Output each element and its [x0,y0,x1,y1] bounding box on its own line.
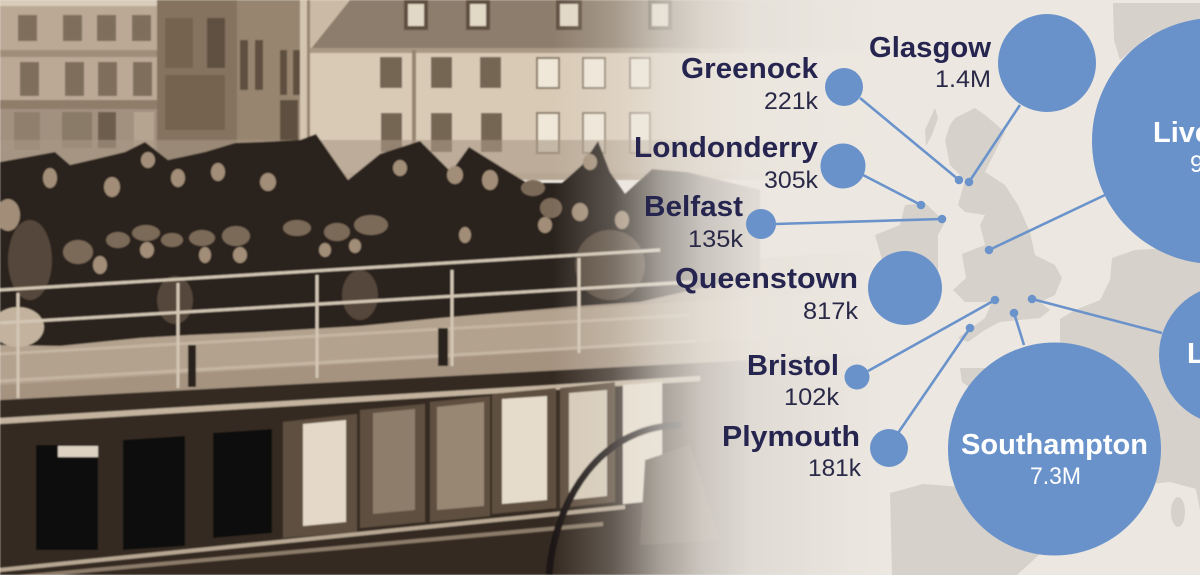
bubble: London [1159,285,1200,425]
paddle wheel arc and figure [549,425,720,575]
map of the British Isles and western Europe [875,3,1200,575]
bubble: Belfast: Belfast [644,191,743,223]
continental Europe [890,240,1200,575]
bubble: Queenstown: 817k [803,298,859,325]
bubble: Liverpool [1092,18,1200,264]
bubble: Bristol: 102k [784,384,840,411]
deck railing [0,250,696,398]
bubble: Belfast [644,191,776,253]
bubble: Queenstown [675,251,942,325]
bubble: Belfast: 135k [688,226,744,253]
bubble: Londonderry [634,132,866,194]
port location dots [917,176,1036,332]
bubble: Greenock: 221k [764,88,819,115]
Scandinavia [1113,3,1200,60]
bubble: Plymouth [722,421,908,482]
ship hull [0,352,900,575]
bubble: Glasgow: Glasgow [869,32,991,64]
ship deck [0,250,900,420]
bubble: Londonderry: Londonderry [634,132,818,164]
Ireland [875,203,945,312]
bubble: Londonderry: 305k [764,167,819,194]
Italy [1192,470,1200,510]
bubble: Greenock: Greenock [681,53,819,85]
connector lines from ports to bubbles [775,98,1162,433]
bubble: Queenstown: Queenstown [675,263,858,295]
Corsica [1171,497,1185,527]
Great Britain [945,108,1062,342]
bubble: Plymouth: Plymouth [722,421,860,453]
bubble: Bristol: Bristol [747,350,839,382]
bubble: Southampton [948,342,1161,556]
bubble: Southampton: Southampton [961,429,1148,461]
Hebrides [925,108,938,146]
crowd of passengers [0,134,760,347]
bubble: Greenock [681,53,863,115]
bubble: Bristol [747,350,870,411]
bubble: Glasgow: 1.4M [935,66,991,93]
bubble: Southampton: 7.3M [1030,463,1081,490]
bubble: Glasgow [869,14,1096,112]
background photo: emigrants on a tender ship [0,0,900,575]
bubble: Plymouth: 181k [808,455,862,482]
buildings behind the ship [0,0,900,180]
